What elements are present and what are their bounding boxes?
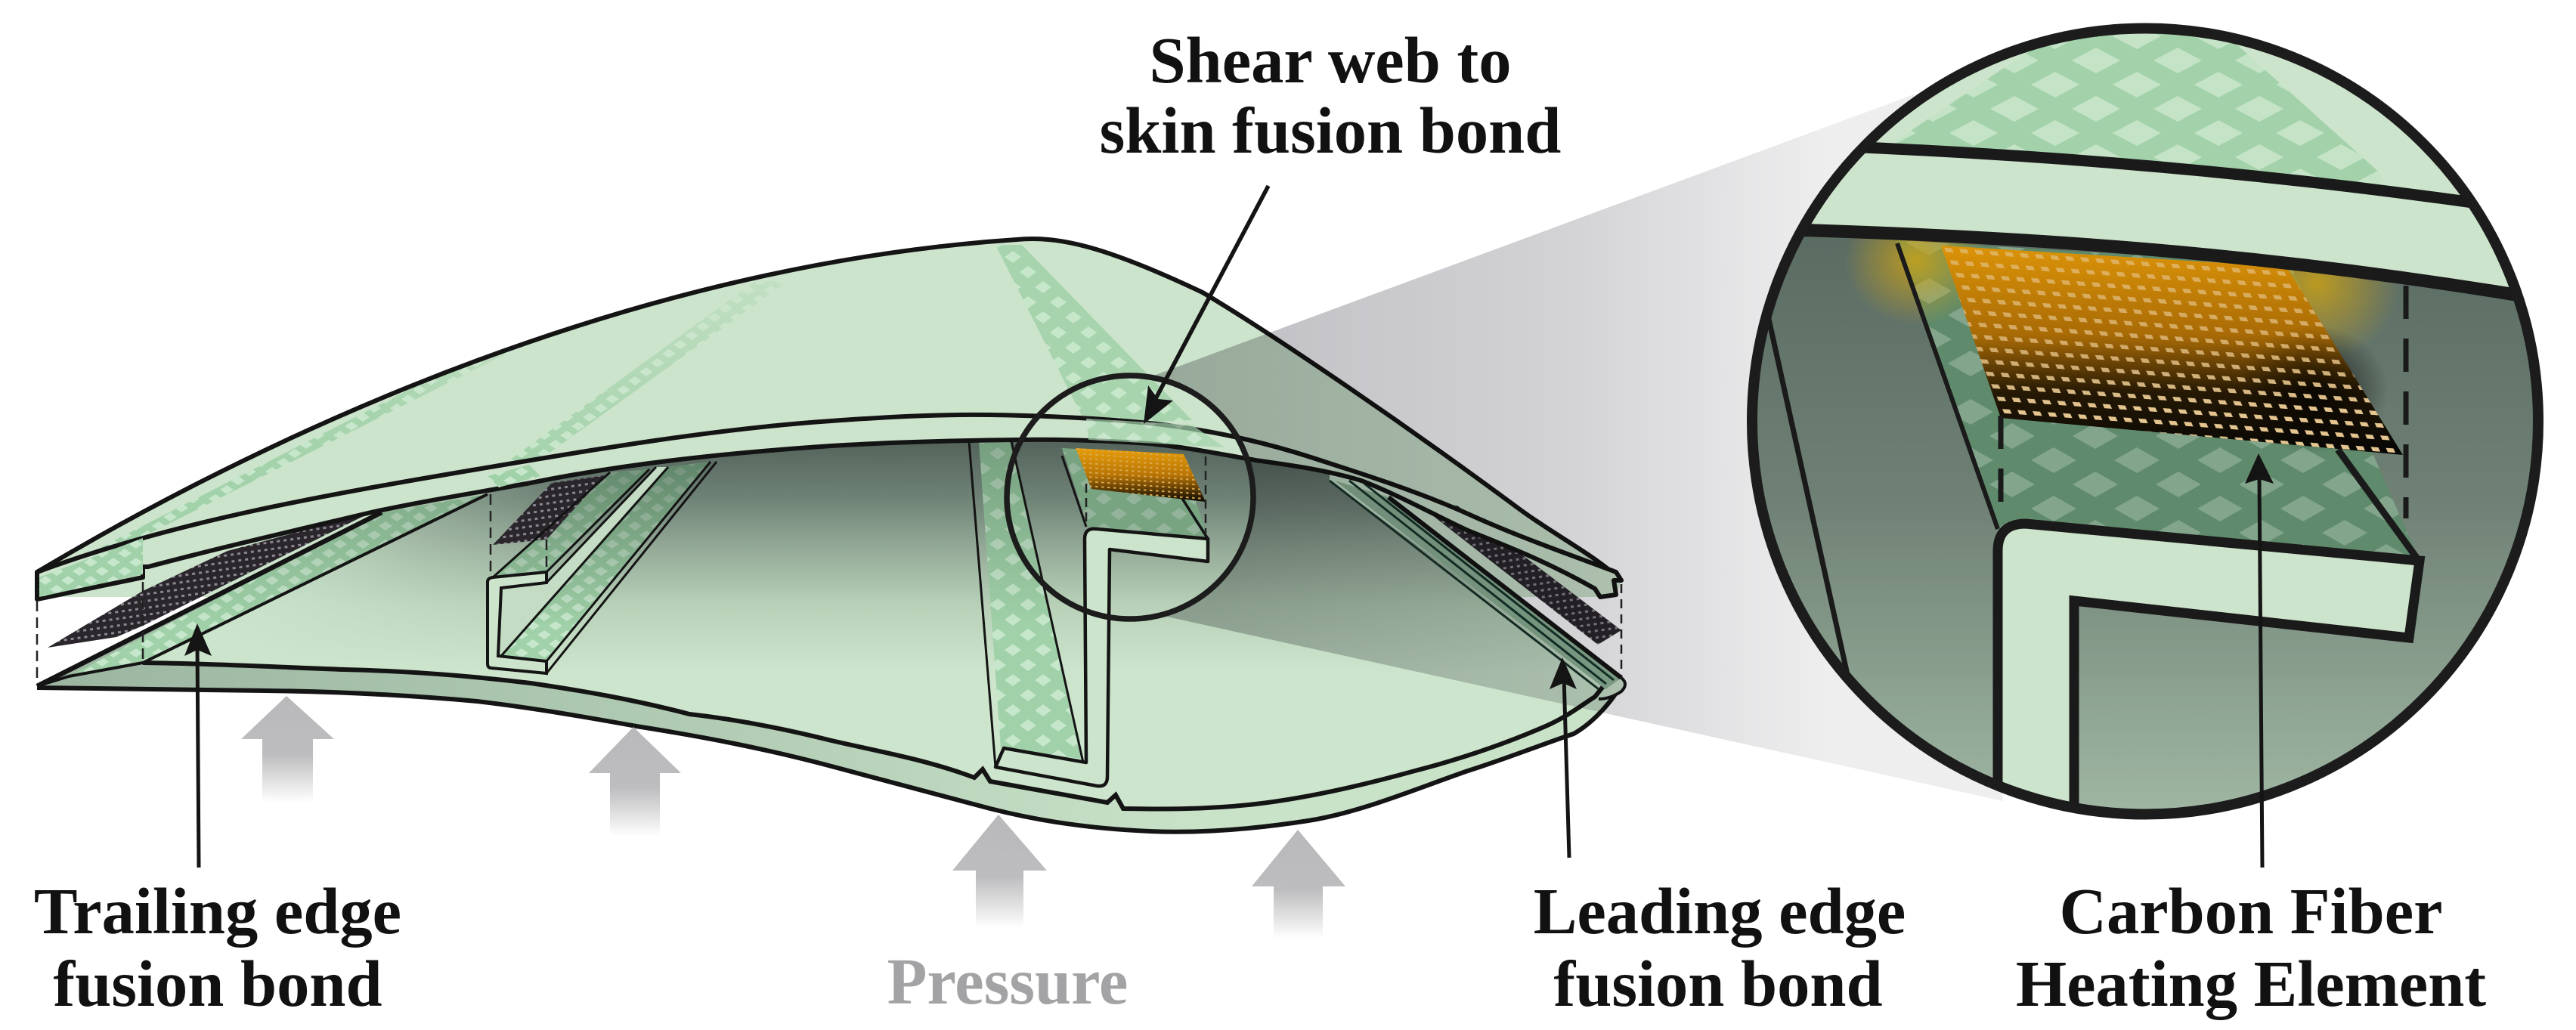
front web L-bracket [995,529,1208,786]
trailing edge heating mesh [48,512,371,648]
magnified outer mesh [1896,33,2381,184]
magnified detail circle [1738,23,2555,839]
upper skin section band [37,415,1621,599]
label: carbon fiber heating element: Carbon Fiber [2060,875,2442,948]
label: trailing edge fusion bond: fusion bond [53,948,382,1020]
magnified dashed lines [2001,286,2406,518]
pressure arrow 2 [589,727,681,837]
label: carbon fiber heating element: Heating Element [2016,948,2486,1020]
diagram: blade cross-section [37,239,1625,832]
magnified L-bracket [1998,524,2420,839]
label: trailing edge fusion bond: Trailing edge [34,875,401,948]
callout arrow: trailing edge [184,623,212,868]
label: leading edge fusion bond: Leading edge [1534,875,1906,948]
small magnifier circle [1007,376,1253,619]
magnified web lines [1767,312,1848,678]
label: shear web to skin fusion bond: skin fusion bond [1100,94,1561,167]
label: shear web to skin fusion bond: Shear web to [1150,24,1511,97]
magnified heating element [1941,246,2403,455]
label: pressure: Pressure [887,945,1128,1018]
pressure arrow 3 [952,815,1047,928]
pressure arrow 4 [1252,830,1345,939]
interior cavity [143,427,1605,809]
magnified skin band [1890,154,2203,177]
small heating element [1076,448,1206,502]
upper skin outer surface [37,239,1621,597]
magnification cone [1150,94,2003,801]
pressure arrow 1 [241,696,334,803]
front shear web [969,441,1208,786]
callout arrow: shear web [1144,186,1268,424]
callout arrow: leading edge [1550,657,1577,858]
magnified cavity [1738,230,2555,831]
magnified skin lines [1844,147,2494,206]
rear shear web [488,462,717,673]
label: leading edge fusion bond: fusion bond [1553,948,1883,1020]
leading edge bond [1330,481,1625,699]
magnified flange strip [1897,240,2420,561]
dashed alignment lines at trailing edge [37,582,143,684]
callout arrow: carbon fiber element [2245,453,2274,868]
heat glow [1850,239,2392,351]
lower skin body [37,427,1621,832]
trailing edge bond strip [37,494,488,686]
